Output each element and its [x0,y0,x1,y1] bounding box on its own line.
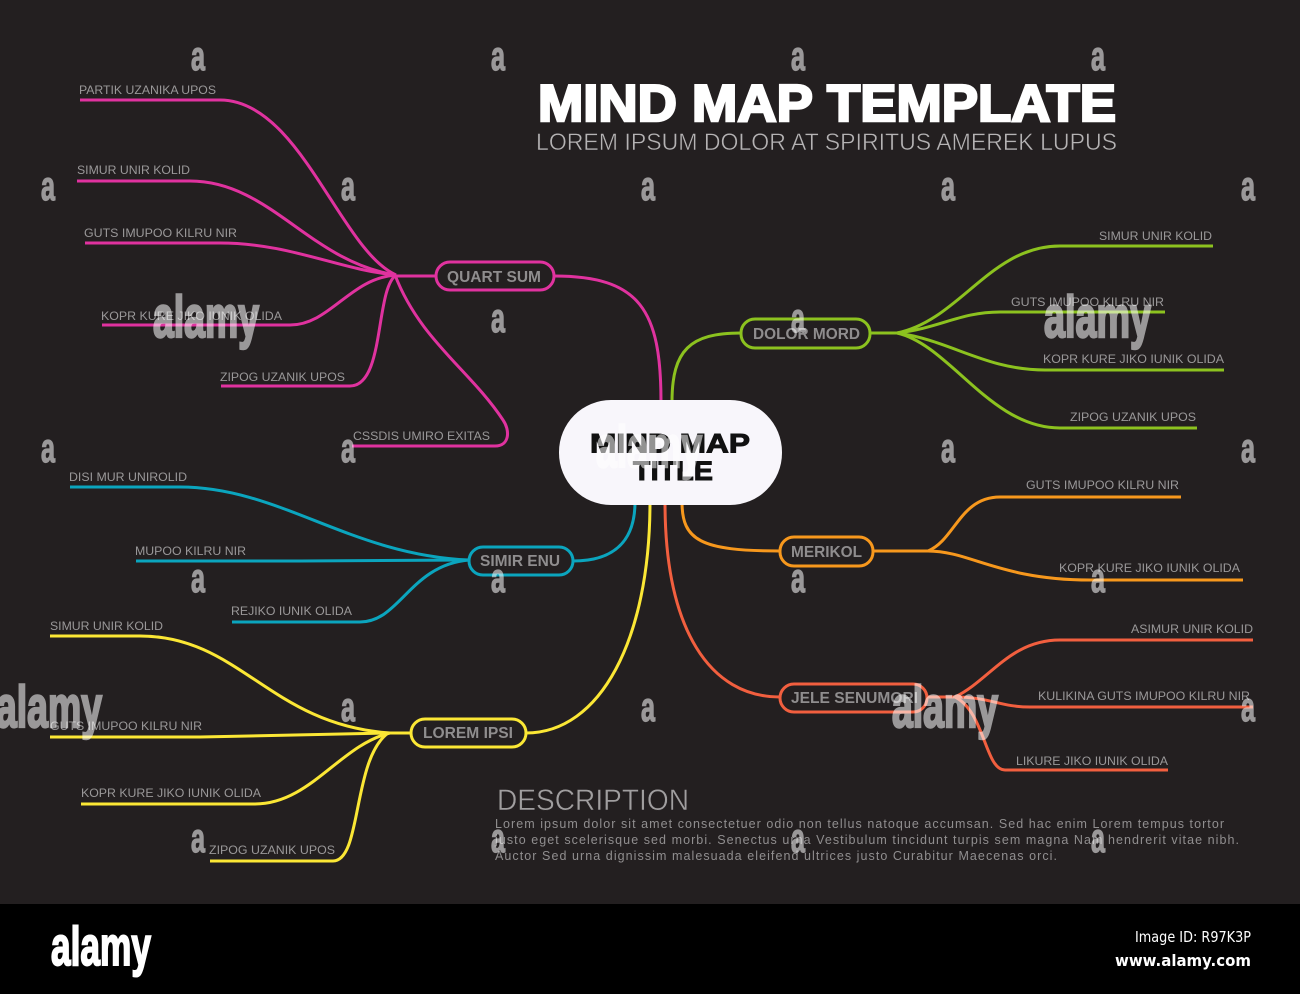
watermark pattern: a [1241,163,1256,209]
watermark pattern: a [191,815,206,861]
labels: merikol: GUTS IMUPOO KILRU NIR [1026,478,1179,492]
description block [494,784,1239,863]
subtitle: LOREM IPSUM DOLOR AT SPIRITUS AMEREK LUPUS [536,129,1117,156]
watermark pattern: a [941,163,956,209]
watermark pattern: a [341,163,356,209]
branch: simir enu (teal) [69,470,635,622]
node: dolor mord: DOLOR MORD [753,326,860,343]
labels: dolor mord: KOPR KURE JIKO IUNIK OLIDA [1043,352,1224,366]
node: simir enu [469,547,573,575]
labels: quart sum: GUTS IMUPOO KILRU NIR [84,226,237,240]
watermark pattern: a [341,425,356,471]
labels: dolor mord: ZIPOG UZANIK UPOS [1070,410,1196,424]
watermark pattern: a [491,815,506,861]
node: dolor mord [741,319,870,348]
labels: lorem ipsi: ZIPOG UZANIK UPOS [209,843,335,857]
watermark pattern: a [791,555,806,601]
watermark pattern: a [791,295,806,341]
watermark pattern: a [641,684,656,730]
watermark pattern: a [1241,425,1256,471]
labels: simir enu: REJIKO IUNIK OLIDA [231,604,352,618]
watermark pattern: a [941,425,956,471]
watermark pattern: alamy [0,675,102,740]
central node: mind map title: MIND MAP [590,428,750,458]
labels: jele senumori [1016,622,1253,768]
central node: mind map title [559,400,782,505]
node: jele senumori [780,684,927,712]
watermark pattern: a [491,33,506,79]
node: merikol: MERIKOL [791,544,862,561]
watermark pattern: a [1091,33,1106,79]
node: quart sum [436,262,554,290]
description heading: DESCRIPTION [497,784,689,817]
labels: jele senumori: ASIMUR UNIR KOLID [1131,622,1253,636]
central node: mind map title: TITLE [633,456,713,486]
node: merikol [780,537,873,566]
labels: quart sum [77,83,490,443]
watermark pattern: a [191,33,206,79]
node: lorem ipsi [411,719,526,747]
labels: dolor mord: GUTS IMUPOO KILRU NIR [1011,295,1164,309]
labels: jele senumori: LIKURE JIKO IUNIK OLIDA [1016,754,1168,768]
labels: dolor mord: SIMUR UNIR KOLID [1099,229,1212,243]
watermark pattern: alamy [153,285,259,350]
labels: lorem ipsi [50,619,335,857]
branch: dolor mord (green) [672,229,1224,428]
website: www.alamy.com [1115,951,1251,970]
footer bar [0,904,1300,994]
labels: quart sum: KOPR KURE JIKO IUNIK OLIDA [101,309,282,323]
watermark pattern: alamy [1044,285,1151,350]
labels: jele senumori: KULIKINA GUTS IMUPOO KILRU NIR [1038,689,1250,703]
node: simir enu: SIMIR ENU [480,553,560,570]
labels: lorem ipsi: KOPR KURE JIKO IUNIK OLIDA [81,786,261,800]
labels: dolor mord [1011,229,1224,424]
description body [494,817,1239,863]
image id: Image ID: R97K3P [1135,928,1251,946]
labels: merikol [1026,478,1240,575]
watermark pattern: alamy [596,415,702,480]
labels: simir enu: DISI MUR UNIROLID [69,470,187,484]
watermark pattern: a [41,163,56,209]
labels: quart sum: ZIPOG UZANIK UPOS [220,370,345,384]
labels: lorem ipsi: GUTS IMUPOO KILRU NIR [50,719,202,733]
description body: justo eget scelerisque sed morbi. Senectus urna Vestibulum tincidunt turpis sem magna Nam hendrerit vitae nibh. [494,833,1239,847]
branch: merikol (orange) [682,478,1243,580]
labels: simir enu: MUPOO KILRU NIR [135,544,246,558]
description body: Auctor Sed urna dignissim malesuada eleifend ultrices justo Curabitur Maecenas orci. [495,849,1057,863]
branch: lorem ipsi (yellow) [50,502,650,861]
watermark pattern: a [341,684,356,730]
footer logo: alamy [51,915,151,977]
watermark pattern: a [1091,555,1106,601]
watermark pattern: a [791,33,806,79]
watermark pattern: a [491,555,506,601]
watermark pattern: a [1241,684,1256,730]
watermark pattern: a [191,555,206,601]
watermark pattern: a [491,295,506,341]
labels: simir enu [69,470,352,618]
watermark pattern: a [1091,815,1106,861]
labels: merikol: KOPR KURE JIKO IUNIK OLIDA [1059,561,1240,575]
node: quart sum: QUART SUM [447,269,541,286]
description body: Lorem ipsum dolor sit amet consectetuer odio non tellus natoque accumsan. Sed hac enim Lorem tempus tortor [495,817,1224,831]
labels: quart sum: PARTIK UZANIKA UPOS [79,83,216,97]
main heading: MIND MAP TEMPLATE [538,75,1116,133]
branch: quart sum (pink) [77,83,661,446]
watermark pattern: alamy [892,675,998,740]
watermark pattern: a [791,815,806,861]
title block [536,75,1117,156]
labels: quart sum: SIMUR UNIR KOLID [77,163,190,177]
branch: jele senumori (red-orange) [665,502,1253,770]
node: lorem ipsi: LOREM IPSI [423,725,513,742]
labels: quart sum: CSSDIS UMIRO EXITAS [353,429,490,443]
labels: lorem ipsi: SIMUR UNIR KOLID [50,619,163,633]
watermark pattern: a [641,163,656,209]
watermark pattern: a [41,425,56,471]
node: jele senumori: JELE SENUMORI [791,690,918,707]
